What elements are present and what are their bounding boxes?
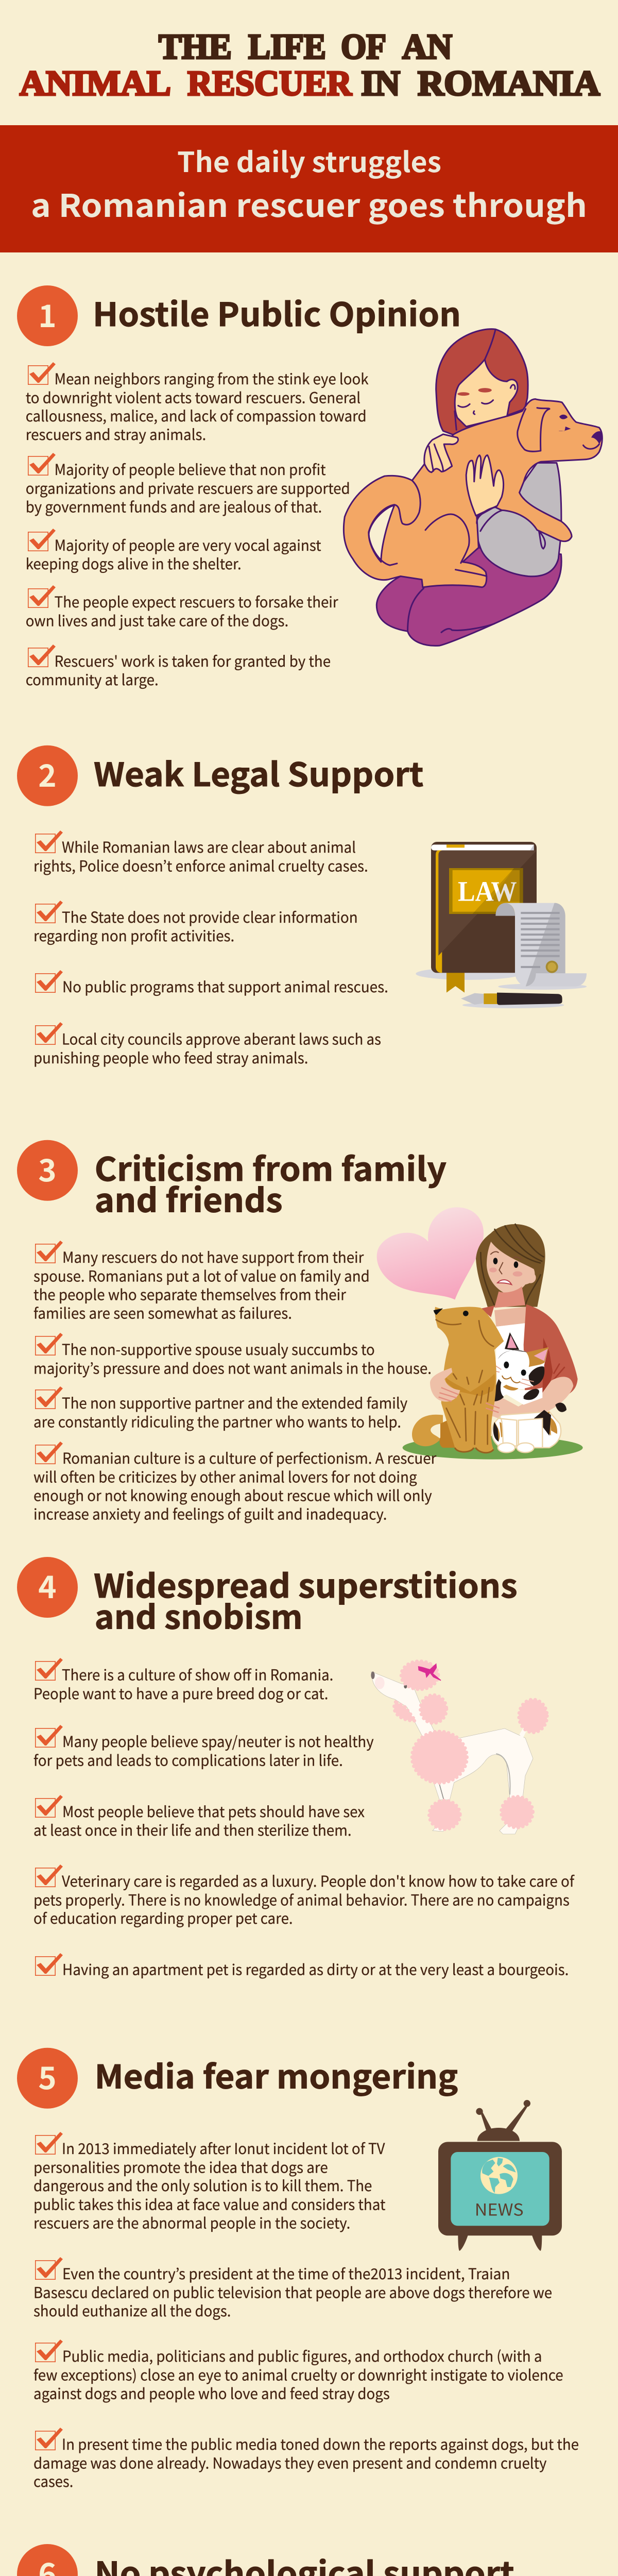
number badge 3 [17,1140,78,1201]
title: AN [402,27,452,66]
heading: Hostile Public Opinion [93,289,461,336]
list item: rescuers are the abnormal people in the society. [33,2211,350,2233]
list item: majority’s pressure and does not want animals in the house. [33,1357,432,1379]
list item: callousness, malice, and lack of compassion toward [26,404,367,426]
number badge 6 [17,2544,78,2576]
illustration: law book, scroll and pen: LAW [458,875,517,907]
list item [33,1333,432,1379]
list item: Having an apartment pet is regarded as dirty or at the very least a bourgeois. [62,1958,569,1980]
list item [33,831,368,876]
list item: own lives and just take care of the dogs. [26,609,288,631]
number badge 1 [17,285,78,346]
heading: Widespread superstitions [94,1561,518,1607]
list item: pets properly. There is no knowledge of animal behavior. There are no campaigns [33,1888,570,1910]
list item: Many people believe spay/neuter is not healthy [62,1730,374,1752]
list item: personalities promote the idea that dogs are [33,2156,328,2177]
list item: enough or not knowing enough about rescue which will only [33,1484,432,1505]
list item [33,1386,407,1432]
list item [33,1658,333,1704]
title: THE [159,27,232,66]
title [20,27,600,103]
banner: a Romanian rescuer goes through [31,180,587,226]
list item: Rescuers' work is taken for granted by the [55,650,331,671]
list item: to downright violent acts toward rescuers. General [26,386,360,408]
number badge 2: 2 [38,751,57,796]
panel: section 4 superstitions and snobism [17,1557,575,1980]
list item: No public programs that support animal rescues. [62,975,388,997]
number badge 3: 3 [38,1146,57,1191]
panel: section 2 weak legal support [17,745,587,1068]
number badge 4 [17,1557,78,1618]
heading: Weak Legal Support [94,749,423,796]
banner: The daily struggles [177,140,441,180]
number badge 5 [17,2048,78,2109]
list item: spouse. Romanians put a lot of value on family and [33,1264,370,1286]
list item: Most people believe that pets should have sex [62,1800,365,1822]
number badge 2 [17,745,78,806]
number badge 4: 4 [38,1563,57,1607]
list item: In present time the public media toned down the reports against dogs, but the [62,2433,579,2454]
banner [0,125,618,252]
list item: public takes this idea at face value and considers that [33,2193,385,2215]
list item: will often be criticizes by other animal lovers for not doing [33,1466,417,1487]
list item: Romanian culture is a culture of perfectionism. A rescuer [62,1447,437,1468]
list item: Veterinary care is regarded as a luxury. People don't know how to take care of [62,1870,575,1891]
title: IN [361,64,400,103]
list item: at least once in their life and then sterilize them. [33,1819,352,1840]
list item: should euthanize all the dogs. [33,2299,231,2321]
illustration: pink poodle [371,1661,547,1834]
list item: The non supportive partner and the extended family [62,1392,407,1413]
list item: organizations and private rescuers are supported [26,477,350,499]
list item: the people who separate themselves from their [33,1283,347,1305]
heading: and snobism [95,1591,303,1638]
list item [26,585,338,631]
list item [26,529,321,574]
list item [33,2257,552,2321]
list item [33,1795,365,1840]
heading: Criticism from family [95,1144,447,1191]
list item: community at large. [26,668,159,690]
list item: by government funds and are jealous of that. [26,495,322,517]
title: ANIMAL [20,64,171,103]
list item: damage was done already. Nowadays they even present and condemn cruelty [33,2451,546,2473]
list item [33,901,358,946]
list item: The State does not provide clear information [62,906,358,927]
list item: rescuers and stray animals. [26,423,206,445]
list item: keeping dogs alive in the shelter. [26,552,242,574]
number badge 1: 1 [38,292,57,336]
list item: for pets and leads to complications later in life. [33,1749,343,1770]
illustration: law book, scroll and pen [416,842,587,1008]
list item: rights, Police doesn’t enforce animal cruelty cases. [33,854,368,876]
list item: In 2013 immediately after Ionut incident lot of TV [62,2137,385,2159]
list item: few exceptions) close an eye to animal cruelty or downright instigate to violence [33,2364,563,2385]
illustration: tv news [438,2100,562,2251]
title: ROMANIA [418,64,600,103]
list item [26,362,369,445]
panel: section 6 no psychological support [17,2544,594,2576]
list item: are constantly ridiculing the partner who wants to help. [33,1411,401,1432]
illustration: tv news: NEWS [475,2197,524,2221]
list item [33,2340,563,2403]
heading: and friends [95,1175,283,1222]
list item: Even the country’s president at the time of the2013 incident, Traian [62,2262,510,2284]
title: LIFE [248,27,326,66]
list item: regarding non profit activities. [33,924,234,946]
heading [94,1561,518,1638]
list item: Majority of people are very vocal against [55,534,321,555]
list item [33,1241,370,1323]
list item: against dogs and people who love and feed stray dogs [33,2382,390,2403]
panel: section 5 media fear mongering [17,2048,579,2492]
list item: People want to have a pure breed dog or cat. [33,1682,328,1704]
list item: dangerous and the only solution is to kill them. The [33,2174,372,2196]
list item: There is a culture of show off in Romania. [62,1663,333,1685]
illustration: woman with dog and cat [377,1207,583,1460]
illustration: woman hugging dog [344,329,602,646]
title: OF [341,27,386,66]
list item: increase anxiety and feelings of guilt and inadequacy. [33,1503,387,1524]
list item: of education regarding proper pet care. [33,1907,293,1928]
list item: Local city councils approve aberant laws such as [62,1027,381,1049]
list item: cases. [33,2470,73,2492]
panel: section 3 criticism from family and friends [17,1140,583,1524]
list item [33,1442,437,1524]
list item: punishing people who feed stray animals. [33,1046,308,1068]
heading [95,1144,447,1222]
list item [33,2132,385,2233]
list item: families are seen somewhat as failures. [33,1301,292,1323]
list item: Many rescuers do not have support from their [62,1246,364,1267]
list item [33,1725,374,1770]
list item [26,453,350,517]
list item: Basescu declared on public television that people are above dogs therefore we [33,2281,552,2303]
list item: Public media, politicians and public figures, and orthodox church (with a [62,2345,542,2366]
number badge 5: 5 [38,2054,57,2098]
list item: Mean neighbors ranging from the stink eye look [55,367,369,389]
list item [33,1022,381,1068]
heading: Media fear mongering [95,2052,458,2098]
list item [33,2428,579,2492]
list item: The people expect rescuers to forsake their [55,590,338,612]
list item: While Romanian laws are clear about animal [62,836,356,857]
list item [33,1865,575,1928]
title: RESCUER [187,64,352,103]
panel: section 1 hostile public opinion [17,285,602,690]
list item [26,645,331,690]
list item: The non-supportive spouse usualy succumbs to [62,1338,375,1360]
list item: Majority of people believe that non profit [55,458,326,480]
